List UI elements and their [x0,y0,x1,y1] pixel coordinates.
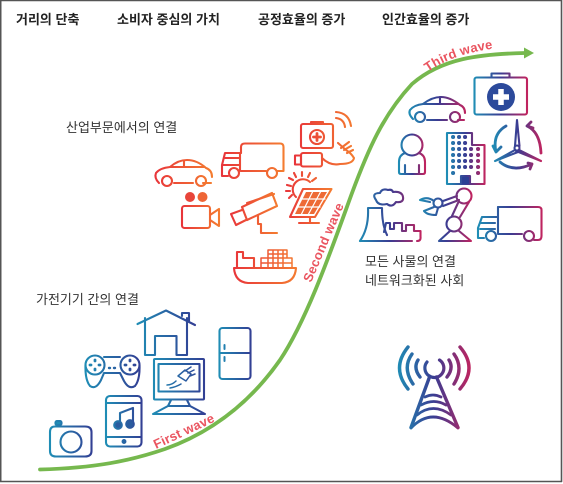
icon: tablet with music note [106,396,142,446]
icon: camera [50,421,92,456]
label: connection of all things: 모든 사물의 연결 [365,254,456,269]
icon: orange car [155,160,212,186]
icon: signal tower [400,347,469,428]
label: third wave: Third wave [423,42,492,70]
heading: consumer-centred value: 소비자 중심의 가치 [117,12,220,27]
arrow: S-curve growth wave [40,48,534,470]
icon: video camera [182,192,219,228]
heading: process efficiency: 공정효율의 증가 [258,12,345,27]
icon: factory [360,189,421,241]
icon: solar panel [286,172,332,223]
icon: purple truck [478,207,542,241]
icon: robotic arm [420,188,472,241]
icon: office building [447,133,484,184]
label: industrial connection: 산업부문에서의 연결 [66,120,177,135]
icon: orange truck [222,144,284,178]
heading: human efficiency: 인간효율의 증가 [382,12,469,27]
label: networked society: 네트워크화된 사회 [365,273,464,288]
icon: blue car [409,97,465,122]
heading: shorter distance: 거리의 단축 [16,12,79,27]
icon: CCTV camera [231,193,277,233]
label: second wave: Second wave [300,200,347,284]
icon: first aid kit [474,74,527,114]
label: first wave: First wave [151,410,217,452]
icon: house [138,310,195,355]
icon: connected medical kit [295,112,354,166]
icon: refrigerator [220,328,250,379]
icon: container ship [234,250,296,283]
icon: person [399,134,425,174]
icon: wind turbine with arrows [493,120,541,169]
icon: game controller [85,356,140,387]
label: home appliance connection: 가전기기 간의 연결 [36,292,139,307]
icon: computer monitor [153,359,205,414]
